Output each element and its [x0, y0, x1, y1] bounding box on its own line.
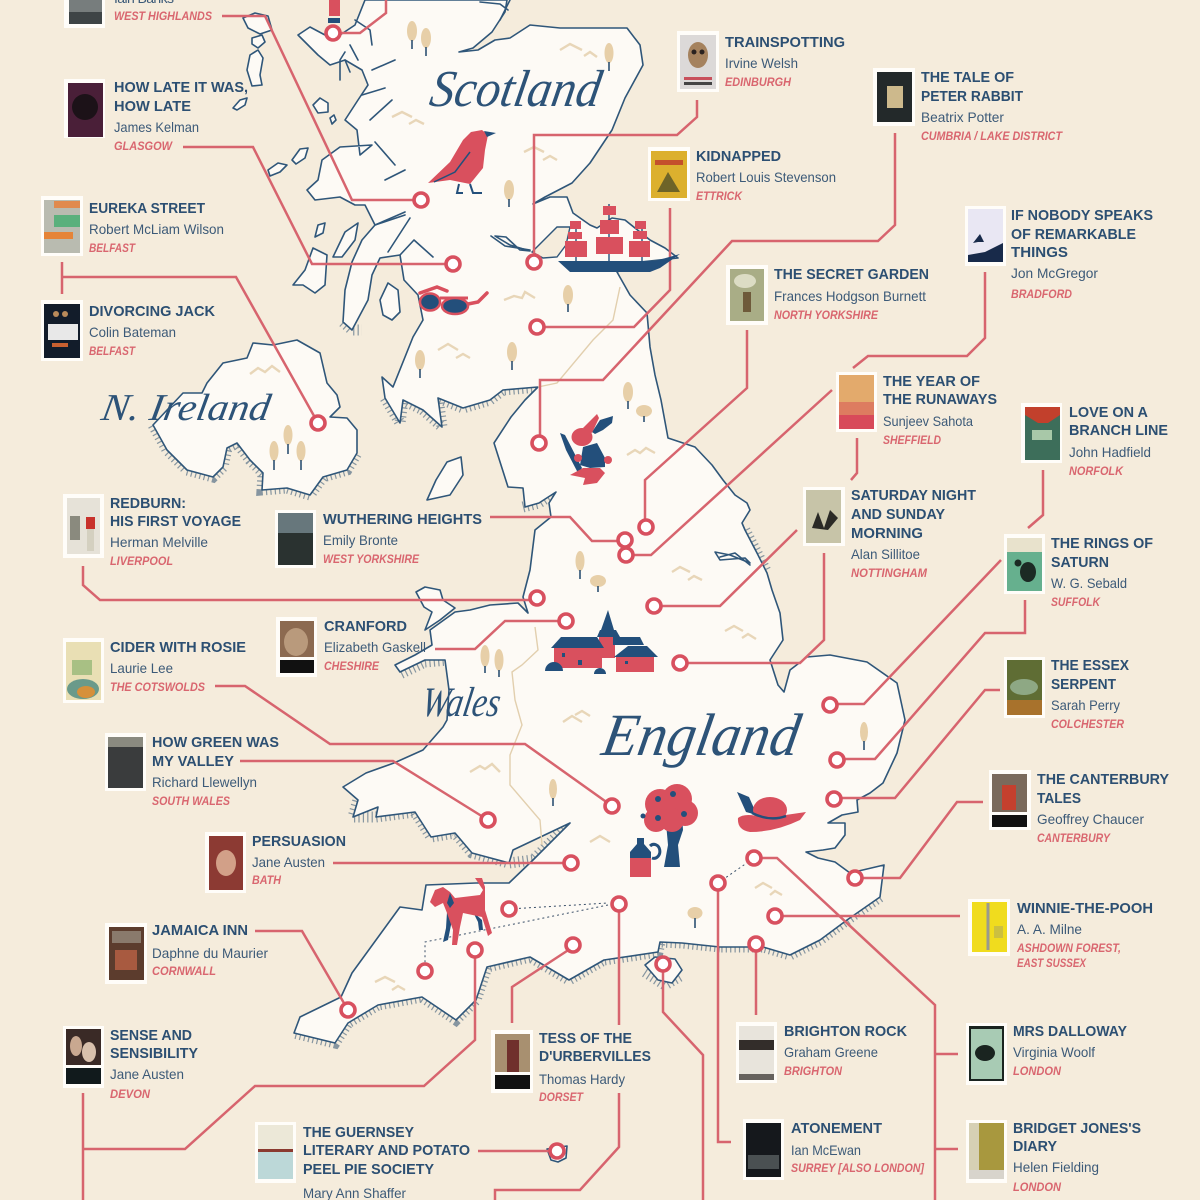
text [725, 34, 845, 89]
text [1037, 771, 1169, 845]
text: Virginia Woolf [1013, 1044, 1095, 1060]
cover [63, 638, 104, 703]
location pins [311, 26, 862, 1158]
text: SURREY [ALSO LONDON] [791, 1163, 925, 1175]
icon: crow [428, 130, 496, 193]
text [539, 1030, 651, 1104]
text: CORNWALL [152, 966, 216, 978]
text: HOW GREEN WAS [152, 734, 279, 751]
text: TRAINSPOTTING [725, 34, 845, 51]
icon: sailing ship [558, 204, 680, 272]
text [1069, 404, 1168, 478]
text: REDBURN: [110, 495, 186, 512]
text: LOVE ON A [1069, 404, 1148, 421]
icon: farmhouse [545, 610, 658, 674]
book: The Guernsey Literary and Potato Peel Pie Society [255, 1122, 470, 1200]
cover [63, 1026, 104, 1088]
text: EDINBURGH [725, 77, 792, 89]
book: Cranford [276, 617, 426, 677]
islands [233, 13, 750, 1162]
map of the United Kingdom [153, 0, 905, 1162]
text: W. G. Sebald [1051, 575, 1127, 591]
book: Kidnapped [648, 147, 836, 203]
text: Jane Austen [252, 854, 325, 870]
text [696, 148, 836, 203]
text [110, 495, 241, 568]
text: AND SUNDAY [851, 506, 945, 523]
map labels: N. Ireland [97, 387, 275, 429]
icon: cider jug [630, 838, 660, 877]
cover [275, 510, 316, 568]
cover [743, 1119, 784, 1180]
text: ATONEMENT [791, 1120, 882, 1137]
text [323, 511, 482, 566]
book: Divorcing Jack [41, 300, 215, 361]
text [851, 487, 976, 580]
land: Great Britain [294, 0, 905, 1043]
text: Sunjeev Sahota [883, 413, 973, 429]
firth inlet [532, 227, 570, 258]
text: Helen Fielding [1013, 1159, 1099, 1175]
cover [64, 0, 105, 28]
book: Redburn [63, 494, 241, 568]
text: Daphne du Maurier [152, 945, 268, 961]
icon: apple tree [640, 784, 698, 867]
text: ETTRICK [696, 191, 743, 203]
text: KIDNAPPED [696, 148, 781, 165]
book: The Canterbury Tales [989, 770, 1169, 845]
text: TESS OF THE [539, 1030, 632, 1047]
book: Brighton Rock [736, 1022, 907, 1083]
text: LONDON [1013, 1182, 1062, 1194]
book: Trainspotting [677, 31, 845, 92]
cover [1004, 657, 1045, 718]
text: CIDER WITH ROSIE [110, 639, 246, 656]
text: Irvine Welsh [725, 55, 798, 71]
text: SOUTH WALES [152, 796, 230, 808]
text: Graham Greene [784, 1044, 878, 1060]
text [114, 79, 248, 153]
text [1013, 1023, 1127, 1078]
text: SATURDAY NIGHT [851, 487, 976, 504]
book: Jamaica Inn [105, 922, 268, 984]
text: LONDON [1013, 1066, 1062, 1078]
book: Bridget Jones's Diary [966, 1120, 1141, 1194]
text: THE RINGS OF [1051, 535, 1153, 552]
text: Ian McEwan [791, 1142, 861, 1158]
text: WEST HIGHLANDS [114, 11, 212, 23]
cover [648, 147, 690, 201]
text: PERSUASION [252, 833, 346, 850]
text: WEST YORKSHIRE [323, 554, 419, 566]
text: NORTH YORKSHIRE [774, 310, 878, 322]
hills [250, 44, 782, 990]
text: CANTERBURY [1037, 833, 1111, 845]
text: PEEL PIE SOCIETY [303, 1161, 434, 1178]
text: THINGS [1011, 244, 1068, 261]
text [110, 639, 246, 694]
text: Jon McGregor [1011, 265, 1098, 281]
text [1051, 657, 1129, 731]
text: Sarah Perry [1051, 697, 1120, 713]
cover [41, 196, 83, 256]
cover [803, 487, 845, 546]
book: Cider with Rosie [63, 638, 246, 703]
book: Wuthering Heights [275, 510, 482, 568]
book: Sense and Sensibility [63, 1026, 198, 1101]
text [921, 69, 1063, 143]
text: Colin Bateman [89, 324, 176, 340]
cover [64, 79, 105, 138]
text: Laurie Lee [110, 660, 173, 676]
text: TALES [1037, 790, 1081, 807]
text: HOW LATE [114, 98, 191, 115]
text: THE SECRET GARDEN [774, 266, 929, 283]
coastal hatching [153, 322, 880, 1043]
text [1013, 1120, 1141, 1194]
text [1011, 207, 1153, 301]
text: THE TALE OF [921, 69, 1014, 86]
map labels: England [597, 702, 806, 769]
country borders [510, 287, 620, 845]
text: SERPENT [1051, 676, 1116, 693]
text: DORSET [539, 1092, 584, 1104]
text: BRADFORD [1011, 289, 1072, 301]
text [152, 734, 279, 808]
text: COLCHESTER [1051, 719, 1125, 731]
text: CHESHIRE [324, 661, 379, 673]
text [303, 1124, 470, 1200]
icon: sunglasses [420, 287, 487, 314]
cover [205, 832, 246, 893]
map labels [97, 60, 806, 769]
text: DIARY [1013, 1138, 1057, 1155]
text: SATURN [1051, 554, 1109, 571]
book: The Year of the Runaways [836, 372, 997, 447]
text: Herman Melville [110, 534, 208, 550]
text: Thomas Hardy [539, 1071, 625, 1087]
cover [836, 372, 877, 432]
book: How Green Was My Valley [105, 733, 279, 808]
book: The Secret Garden [726, 265, 929, 325]
book: Tess of the D'Urbervilles [491, 1030, 651, 1104]
text: GLASGOW [114, 141, 173, 153]
text [784, 1023, 907, 1078]
book: How Late It Was, How Late [64, 79, 248, 153]
cover [105, 923, 147, 984]
trees [270, 21, 868, 928]
text: Robert Louis Stevenson [696, 169, 836, 185]
text: THE ESSEX [1051, 657, 1129, 674]
cover [736, 1022, 777, 1083]
text: SENSIBILITY [110, 1045, 198, 1062]
cover [966, 1120, 1007, 1183]
cover [1021, 403, 1062, 463]
text: Alan Sillitoe [851, 546, 920, 562]
text: Robert McLiam Wilson [89, 221, 224, 237]
cover [873, 68, 915, 126]
cover [965, 206, 1006, 266]
cover [105, 733, 146, 791]
book: The Tale of Peter Rabbit [873, 68, 1063, 143]
cover [63, 494, 104, 558]
cover [677, 31, 719, 92]
text [152, 922, 268, 978]
text: A. A. Milne [1017, 921, 1082, 937]
text: LIVERPOOL [110, 556, 173, 568]
text: THE RUNAWAYS [883, 391, 997, 408]
text [114, 0, 212, 23]
text: SENSE AND [110, 1027, 192, 1044]
text: WINNIE-THE-POOH [1017, 900, 1153, 917]
cover [726, 265, 768, 325]
book: Winnie-the-Pooh [968, 899, 1153, 970]
text: Geoffrey Chaucer [1037, 811, 1144, 827]
text: Beatrix Potter [921, 109, 1004, 125]
text: DIVORCING JACK [89, 303, 215, 320]
text: BATH [252, 875, 282, 887]
text: IF NOBODY SPEAKS [1011, 207, 1153, 224]
text: BRIGHTON [784, 1066, 843, 1078]
text: CUMBRIA / LAKE DISTRICT [921, 131, 1063, 143]
text: DEVON [110, 1089, 151, 1101]
text: Richard Llewellyn [152, 774, 257, 790]
icon: lighthouse [328, 0, 340, 23]
text [774, 266, 929, 322]
text [1016, 900, 1153, 970]
map labels: Wales [418, 679, 504, 726]
text: MY VALLEY [152, 753, 234, 770]
text: BELFAST [89, 243, 136, 255]
text [89, 200, 224, 255]
book: Mrs Dalloway [966, 1023, 1127, 1085]
text [324, 618, 426, 673]
cover [1004, 534, 1045, 594]
cover [491, 1030, 533, 1093]
text [1051, 535, 1153, 609]
book: Saturday Night and Sunday Morning [803, 487, 976, 580]
text: NORFOLK [1069, 466, 1124, 478]
text [791, 1120, 925, 1175]
cover [968, 899, 1010, 956]
text: MRS DALLOWAY [1013, 1023, 1127, 1040]
icon: hound [430, 878, 492, 945]
text: SUFFOLK [1051, 597, 1101, 609]
book: Love on a Branch Line [1021, 403, 1168, 478]
text: Frances Hodgson Burnett [774, 288, 926, 304]
text: EAST SUSSEX [1017, 958, 1087, 970]
land: Northern Ireland [153, 340, 357, 495]
text: SHEFFIELD [883, 435, 941, 447]
cover [276, 617, 317, 677]
book: Eureka Street [41, 196, 224, 256]
text: Elizabeth Gaskell [324, 639, 426, 655]
text: D'URBERVILLES [539, 1048, 651, 1065]
text: OF REMARKABLE [1011, 226, 1136, 243]
book: If Nobody Speaks of Remarkable Things [965, 206, 1153, 301]
text: JAMAICA INN [152, 922, 248, 939]
text: Jane Austen [110, 1066, 184, 1082]
text: John Hadfield [1069, 444, 1151, 460]
icon: feathered hat [737, 792, 806, 832]
text [110, 1027, 198, 1101]
text: THE CANTERBURY [1037, 771, 1169, 788]
text [89, 303, 215, 358]
text: PETER RABBIT [921, 88, 1023, 105]
book: The Rings of Saturn [1004, 534, 1153, 609]
book: West Highlands [64, 0, 212, 28]
text: Emily Bronte [323, 532, 398, 548]
text: ASHDOWN FOREST, [1016, 943, 1121, 955]
text: LITERARY AND POTATO [303, 1142, 470, 1159]
icon: Peter Rabbit [560, 414, 613, 485]
text: BRANCH LINE [1069, 422, 1168, 439]
cover [255, 1122, 296, 1183]
text: CRANFORD [324, 618, 407, 635]
text: BRIGHTON ROCK [784, 1023, 907, 1040]
text: THE COTSWOLDS [110, 682, 205, 694]
book: Persuasion [205, 832, 346, 893]
text: NOTTINGHAM [851, 568, 927, 580]
text: WUTHERING HEIGHTS [323, 511, 482, 528]
sea lochs and inlets [340, 0, 750, 565]
book: Atonement [743, 1119, 925, 1180]
text [252, 833, 346, 887]
cover [966, 1023, 1007, 1085]
text: James Kelman [114, 119, 199, 135]
text: EUREKA STREET [89, 200, 205, 217]
text: BELFAST [89, 346, 136, 358]
text: THE GUERNSEY [303, 1124, 414, 1141]
cover [41, 300, 83, 361]
map labels: Scotland [426, 60, 607, 118]
cover [989, 770, 1031, 830]
book: The Essex Serpent [1004, 657, 1129, 731]
text: HOW LATE IT WAS, [114, 79, 248, 96]
text: BRIDGET JONES'S [1013, 1120, 1141, 1137]
text [883, 373, 997, 447]
text: MORNING [851, 525, 923, 542]
text: HIS FIRST VOYAGE [110, 513, 241, 530]
text: THE YEAR OF [883, 373, 980, 390]
